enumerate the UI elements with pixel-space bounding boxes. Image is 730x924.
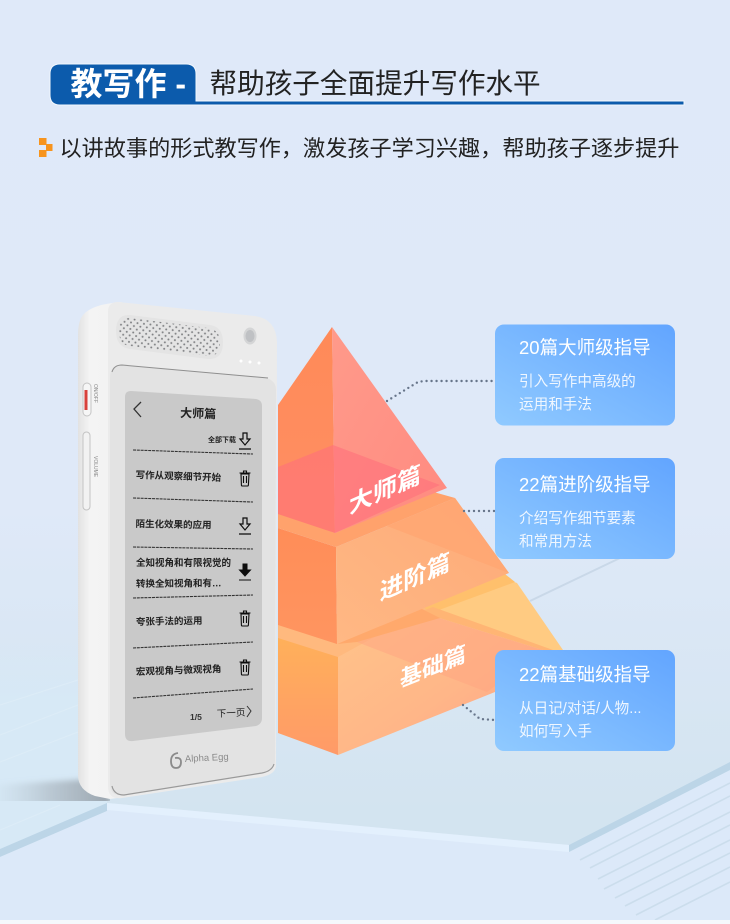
icon: downloading row 3: [239, 564, 251, 580]
download all: 全部下载: [208, 435, 236, 444]
screen bezel: [110, 365, 276, 795]
label: 大师篇: 大师篇: [349, 461, 421, 520]
list rows: 写作从观察细节开始: [135, 469, 222, 484]
dotted connectors: [387, 381, 495, 720]
device side: [78, 302, 125, 799]
panel: 20篇大师级指导: 引入写作中高级的: [519, 373, 636, 390]
panel: 22篇基础级指导: [495, 650, 675, 751]
icon: download row 2: [239, 518, 251, 534]
icon: orange bullet: [39, 138, 52, 157]
icon: download: [239, 433, 251, 449]
header: subtitle: 帮助孩子全面提升写作水平: [210, 68, 541, 99]
list rows: 夸张手法的运用: [136, 615, 203, 628]
e-ink screen: [125, 391, 262, 741]
screen title: 大师篇: [180, 405, 216, 421]
label: 进阶篇: 进阶篇: [380, 548, 450, 606]
base tier: [278, 570, 563, 755]
side buttons: ON/OFF: [92, 384, 98, 403]
panel: 22篇进阶级指导: 介绍写作细节要素: [519, 510, 636, 527]
next page: 下一页: [217, 708, 246, 720]
list rows: 全知视角和有限视觉的: [136, 557, 231, 569]
panel: 22篇基础级指导: 如何写入手: [519, 723, 592, 740]
device front: [108, 302, 277, 798]
icon: trash row 5: [240, 660, 250, 675]
icon: trash row 4: [240, 611, 250, 626]
panel: 22篇进阶级指导: [495, 458, 675, 559]
intro text: 以讲故事的形式教写作，激发孩子学习兴趣，帮助孩子逐步提升: [60, 136, 679, 161]
side buttons: VOLUME: [92, 456, 98, 478]
panel: 22篇基础级指导: 从日记/对话/人物...: [519, 700, 641, 717]
icon: back arrow: [134, 402, 141, 417]
label: 基础篇: 基础篇: [400, 640, 466, 692]
panel: 22篇基础级指导: 22篇基础级指导: [519, 664, 651, 685]
top tier: [278, 327, 447, 533]
floor platform: [0, 558, 730, 924]
list rows: 陌生化效果的应用: [135, 518, 212, 531]
panel: 20篇大师级指导: 20篇大师级指导: [519, 337, 651, 358]
list rows: 转换全知视角和有…: [136, 577, 222, 590]
logo: Alpha Egg: Alpha Egg: [185, 752, 229, 765]
header: title badge: [50, 64, 684, 105]
panel: 22篇进阶级指导: 和常用方法: [519, 533, 592, 550]
page number: 1/5: [190, 712, 202, 722]
icon: trash row 1: [240, 471, 250, 486]
side buttons: [83, 383, 98, 510]
icon: speaker grille: [116, 315, 223, 359]
dividers: [133, 450, 253, 698]
icon: indicator lights: [240, 360, 260, 364]
icon: camera: [244, 328, 256, 344]
header: title badge: 教写作 -: [70, 66, 186, 102]
list rows: 宏观视角与微观视角: [136, 663, 222, 678]
panel: 20篇大师级指导: 运用和手法: [519, 396, 592, 413]
list rows: [135, 469, 231, 678]
logo: Alpha Egg: [171, 752, 229, 768]
chart: writing pyramid: [278, 327, 563, 755]
panel: 20篇大师级指导: [495, 324, 675, 426]
icon: next arrow: [247, 706, 251, 717]
device: e-ink reader: [78, 302, 277, 799]
middle tier: [278, 491, 509, 644]
panel: 22篇进阶级指导: 22篇进阶级指导: [519, 474, 651, 495]
